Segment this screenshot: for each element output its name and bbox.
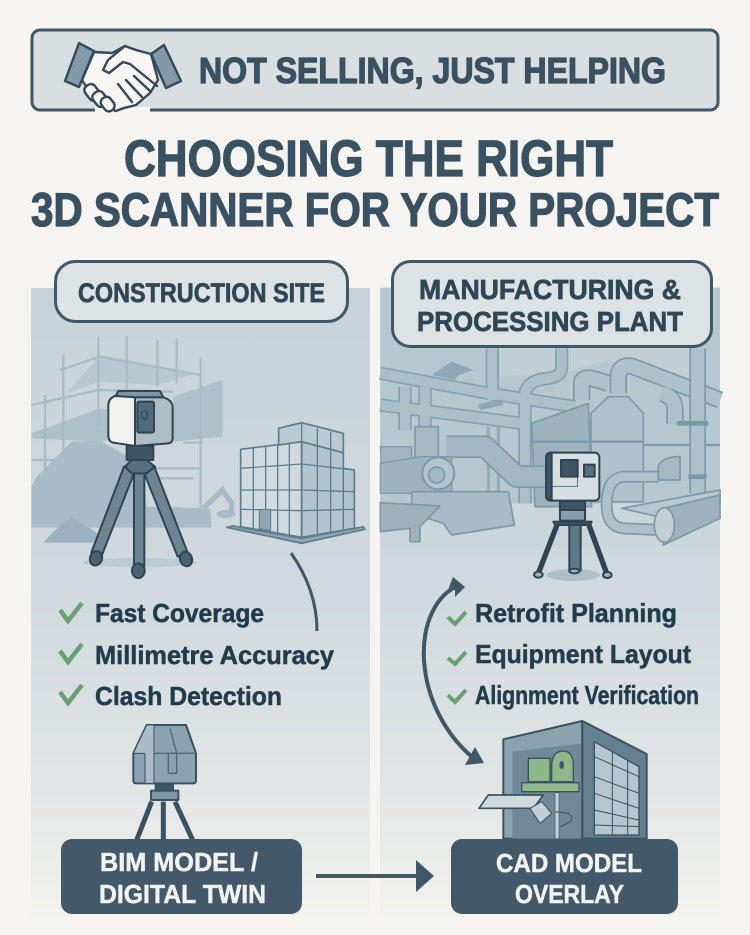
- check marks: [448, 612, 466, 702]
- checklist text: [475, 598, 699, 710]
- box: CAD model overlay: CAD MODEL: [496, 848, 642, 878]
- checklist text: Alignment Verification: [475, 680, 699, 710]
- check marks: [60, 603, 82, 703]
- icon: laser scanner on tripod: [83, 391, 197, 578]
- title: CHOOSING THE RIGHT: [124, 130, 613, 187]
- icon: BIM scanner model: [133, 725, 196, 840]
- label: manufacturing and processing plant: PROCESSING PLANT: [417, 306, 683, 337]
- icon: building: [227, 423, 365, 543]
- checklist text: Clash Detection: [95, 681, 282, 711]
- box: BIM model / digital twin: [61, 839, 302, 914]
- label: manufacturing and processing plant: MANUFACTURING &: [419, 274, 681, 305]
- icon: building with CAD overlay: [479, 721, 647, 839]
- banner text: NOT SELLING, JUST HELPING: [199, 50, 666, 91]
- checklist text: Retrofit Planning: [475, 598, 677, 628]
- checklist text: Millimetre Accuracy: [95, 640, 335, 670]
- construction background scene: [32, 336, 235, 543]
- checklist text: Fast Coverage: [95, 598, 264, 628]
- plant background scene: [380, 288, 720, 547]
- checklist text: [95, 598, 335, 711]
- checklist text: Equipment Layout: [475, 639, 691, 669]
- icon: plant scanner on tripod: [534, 453, 612, 581]
- box: CAD model overlay: OVERLAY: [515, 879, 624, 909]
- curved double-headed arrow: [424, 577, 484, 765]
- label: manufacturing and processing plant: [392, 262, 712, 346]
- label: construction site: CONSTRUCTION SITE: [78, 278, 325, 308]
- box: BIM model / digital twin: DIGITAL TWIN: [99, 879, 266, 909]
- curved connector line: [291, 553, 317, 631]
- title: [31, 130, 719, 236]
- panel: manufacturing and processing plant: [380, 262, 720, 918]
- checklist: construction: [60, 598, 335, 711]
- banner: [32, 30, 718, 113]
- panel: construction site: [31, 262, 370, 918]
- arrow: BIM to CAD: [316, 860, 434, 892]
- icon: handshake: [65, 43, 181, 113]
- box: CAD model overlay: [451, 839, 678, 914]
- checklist: manufacturing: [448, 598, 699, 710]
- label: construction site: [56, 262, 348, 322]
- box: BIM model / digital twin: BIM MODEL /: [100, 847, 258, 877]
